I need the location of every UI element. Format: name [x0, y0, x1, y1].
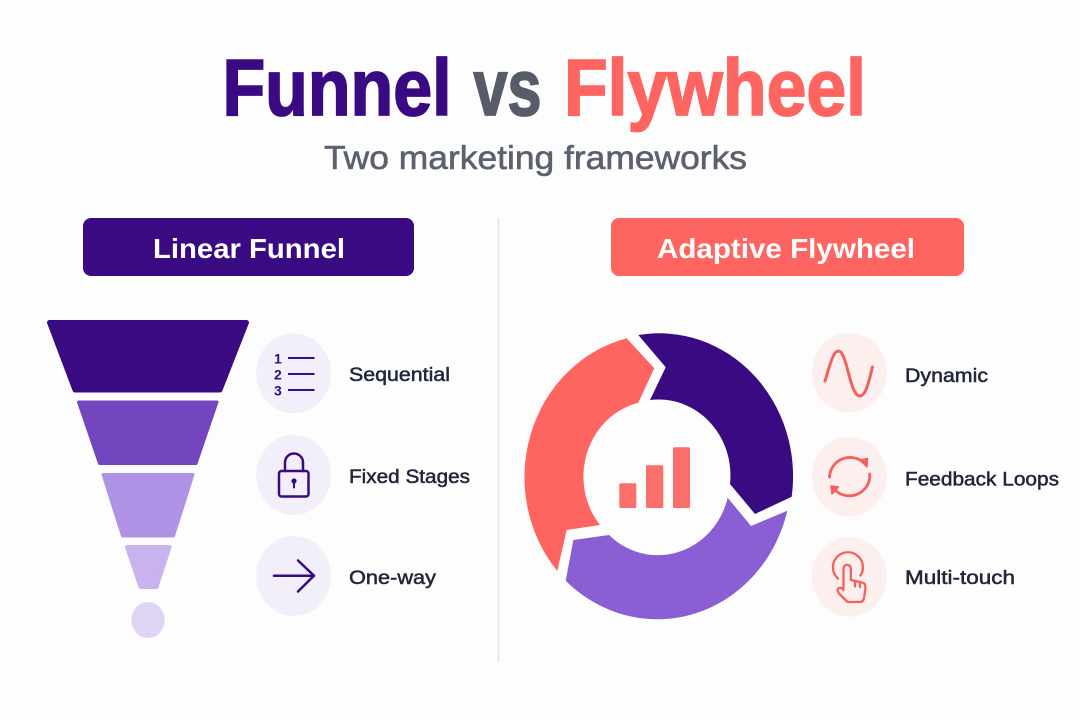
flywheel segment: navy: [638, 333, 793, 514]
funnel item: Fixed Stages: [256, 435, 470, 515]
funnel stage 2: [78, 402, 217, 464]
title: Funnel: [222, 43, 452, 132]
flywheel item: Feedback Loops: [812, 437, 1059, 517]
icon: numbered list: 2: [274, 367, 282, 383]
funnel stage 5: [131, 602, 165, 638]
title: [222, 43, 866, 132]
icon: numbered list: 3: [274, 383, 282, 399]
label: Feedback Loops: Feedback Loops: [905, 468, 1059, 490]
subtitle: Two marketing frameworks: [324, 139, 747, 176]
flywheel item: Multi-touch: [812, 537, 1015, 617]
icon: lock: [279, 454, 308, 496]
flywheel chart: [524, 333, 793, 619]
funnel chart: [50, 322, 246, 638]
heading: Adaptive Flywheel: [611, 218, 964, 276]
flywheel item: Dynamic: [812, 333, 988, 413]
icon: arrow: [274, 560, 314, 592]
icon: bar chart: [619, 447, 690, 508]
flywheel segment: coral: [524, 338, 654, 571]
label: Fixed Stages: Fixed Stages: [349, 466, 470, 488]
title: Flywheel: [564, 43, 866, 132]
label: Sequential: Sequential: [349, 364, 450, 386]
funnel item: One-way: [256, 536, 436, 616]
label: Dynamic: Dynamic: [905, 365, 988, 387]
icon: touch hand: [833, 552, 866, 602]
heading: Adaptive Flywheel: Adaptive Flywheel: [657, 233, 915, 264]
heading: Linear Funnel: Linear Funnel: [153, 233, 345, 264]
label: Multi-touch: Multi-touch: [905, 567, 1015, 589]
label: One-way: One-way: [349, 567, 436, 589]
heading: Linear Funnel: [83, 218, 414, 276]
funnel stage 4: [127, 547, 170, 587]
title: vs: [474, 43, 542, 132]
icon: feedback loop: [830, 457, 870, 496]
icon: numbered list: 1: [274, 350, 282, 366]
icon: numbered list: [274, 350, 314, 399]
funnel item: Sequential: [256, 333, 450, 413]
flywheel segment: purple: [566, 498, 787, 619]
funnel stage 3: [103, 474, 193, 536]
icon: sine wave: [825, 351, 872, 396]
funnel stage 1: [50, 322, 246, 390]
